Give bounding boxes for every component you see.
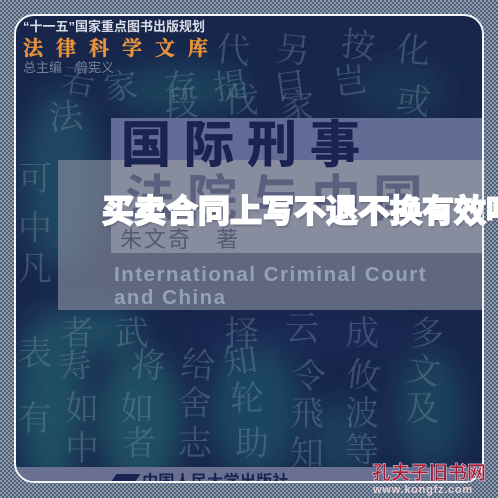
cover texture and calligraphy: 舍 bbox=[178, 376, 212, 425]
cover texture and calligraphy: 家 bbox=[101, 58, 140, 110]
cover title line one: 国际刑事 bbox=[121, 118, 373, 173]
cover texture and calligraphy: 成 bbox=[345, 306, 379, 355]
cover texture and calligraphy: 如 bbox=[65, 381, 99, 430]
cover texture and calligraphy: 若 bbox=[58, 52, 100, 106]
cover texture and calligraphy: 知 bbox=[220, 332, 260, 385]
cover texture and calligraphy: 知 bbox=[290, 426, 324, 475]
cover texture and calligraphy: 存 bbox=[161, 58, 200, 110]
cover texture and calligraphy: 云 bbox=[285, 301, 319, 350]
cover texture and calligraphy: 另 bbox=[274, 21, 313, 73]
cover texture and calligraphy: 有 bbox=[18, 391, 52, 440]
editor line: 总主编 曾宪义 bbox=[23, 60, 114, 75]
cover texture and calligraphy: 按 bbox=[339, 16, 379, 69]
cover texture and calligraphy: 可 bbox=[18, 151, 52, 200]
cover texture and calligraphy: 法 bbox=[46, 88, 86, 140]
cover texture and calligraphy: 择 bbox=[225, 306, 259, 355]
english title: International Criminal Court bbox=[114, 263, 427, 286]
cover title line two: 法院与中国 bbox=[125, 171, 435, 227]
cover texture and calligraphy: 及 bbox=[405, 381, 439, 430]
upper gray band bbox=[111, 160, 482, 253]
cover texture and calligraphy: 多 bbox=[410, 306, 444, 355]
panel: gray title overlay bbox=[58, 160, 482, 310]
watermark bbox=[372, 462, 486, 496]
cover texture and calligraphy: 伐 bbox=[225, 73, 259, 122]
publisher strip bbox=[16, 467, 482, 481]
cover texture and calligraphy: 代 bbox=[214, 21, 253, 73]
cover texture and calligraphy: 段 bbox=[165, 76, 199, 125]
english title: and China bbox=[114, 286, 227, 309]
author: 朱文奇 著 bbox=[120, 227, 240, 252]
cover texture and calligraphy: 提 bbox=[210, 57, 250, 110]
cover texture and calligraphy: 攸 bbox=[344, 346, 384, 400]
cover texture and calligraphy: 化 bbox=[394, 21, 433, 73]
cover texture and calligraphy: 中 bbox=[18, 201, 52, 250]
series title: 法律科学文库 bbox=[23, 32, 221, 61]
cover texture and calligraphy: 目 bbox=[270, 57, 310, 110]
cover texture and calligraphy: 飛 bbox=[290, 386, 324, 435]
cover texture and calligraphy: 凡 bbox=[18, 241, 52, 290]
cover texture and calligraphy: 武 bbox=[115, 306, 149, 355]
cover texture and calligraphy: 将 bbox=[129, 336, 168, 388]
cover texture and calligraphy: 岂 bbox=[330, 52, 370, 105]
cover texture and calligraphy: 家 bbox=[280, 79, 314, 128]
cover texture and calligraphy: 助 bbox=[235, 416, 269, 465]
cover texture and calligraphy: 文 bbox=[404, 341, 444, 395]
top series line: “十一五”国家重点图书出版规划 bbox=[23, 19, 205, 34]
publisher logo bbox=[109, 474, 141, 484]
cover texture and calligraphy: 者 bbox=[122, 416, 156, 465]
cover texture and calligraphy: 志 bbox=[178, 416, 213, 465]
cover texture and calligraphy: 寿 bbox=[55, 337, 95, 390]
cover texture and calligraphy: 给 bbox=[179, 336, 218, 388]
cover texture and calligraphy: 如 bbox=[120, 381, 154, 430]
cover texture and calligraphy: 表 bbox=[18, 326, 52, 375]
cover texture and calligraphy: 令 bbox=[289, 346, 329, 400]
english title bbox=[114, 263, 427, 309]
cover texture and calligraphy: 等 bbox=[345, 423, 379, 472]
watermark url: www.kongfz.com bbox=[373, 484, 473, 496]
cover texture and calligraphy: 轮 bbox=[230, 371, 264, 420]
cover texture and calligraphy: 者 bbox=[60, 306, 94, 355]
watermark name: 孔夫子旧书网 bbox=[372, 463, 486, 484]
cover texture and calligraphy: 中 bbox=[65, 421, 99, 470]
panel: title band bbox=[111, 118, 482, 253]
cover texture and calligraphy: 波 bbox=[345, 386, 379, 435]
cover texture and calligraphy: 或 bbox=[394, 71, 434, 125]
